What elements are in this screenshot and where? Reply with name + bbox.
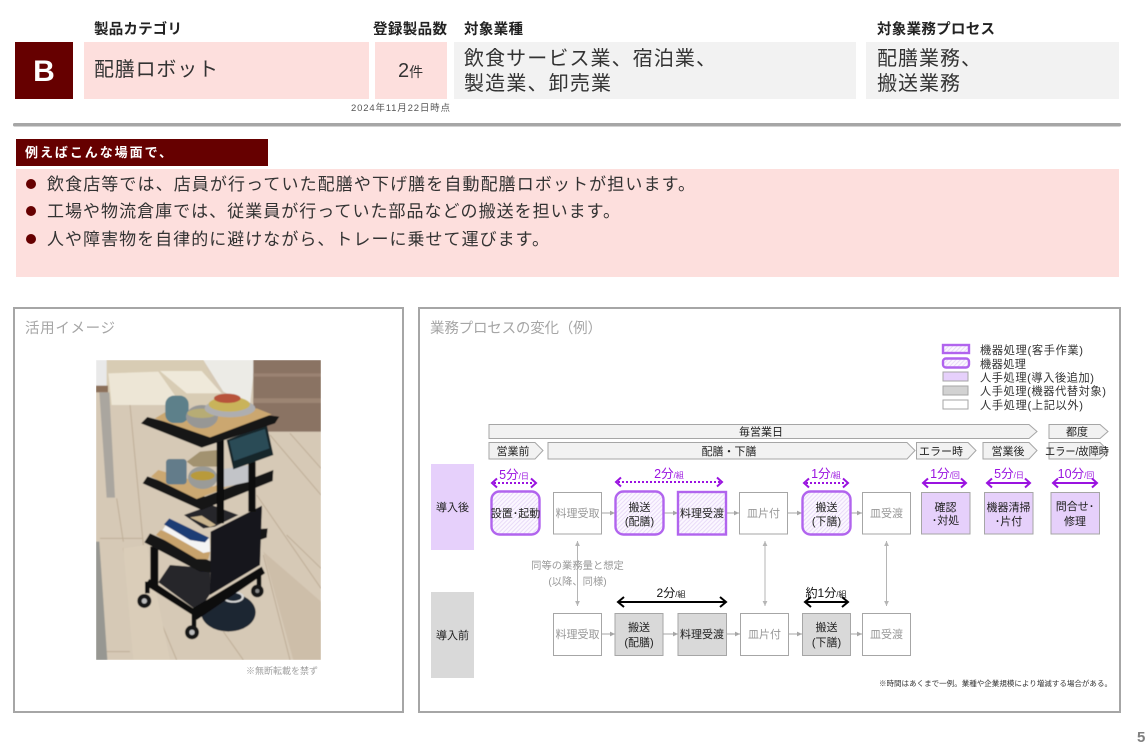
box: transport serving — [615, 614, 663, 656]
box: inquiry and repair: 修理 — [1064, 514, 1086, 528]
timeline banners: 都度 — [1066, 426, 1088, 438]
dotted arrow: setup — [492, 478, 536, 488]
box: clear dishes — [740, 492, 788, 534]
casters — [137, 594, 151, 608]
heading: registered products: 登録製品数 — [373, 20, 448, 38]
field: target business process — [866, 42, 1119, 99]
scene banner: 例えばこんな場面で、 — [25, 145, 172, 160]
usage image heading: 活用イメージ — [25, 320, 115, 337]
box: cleaning: 機器清掃 — [986, 500, 1030, 514]
box: receive food: 料理受取 — [556, 627, 600, 641]
box: cleaning: ･片付 — [995, 515, 1022, 528]
field: target business process: 搬送業務 — [877, 72, 960, 95]
box: setup and start: 設置･起動 — [491, 506, 540, 520]
time labels after — [499, 467, 1094, 482]
bullet 2: 工場や物流倉庫では、従業員が行っていた部品などの搬送を担います。 — [47, 202, 620, 221]
timeline banners: エラー/故障時 — [1045, 444, 1109, 458]
solid arrow: inquiry — [1053, 478, 1097, 488]
box: clear dishes: 皿片付 — [747, 507, 780, 520]
bottom plate — [158, 565, 211, 612]
box: clear dishes — [740, 614, 788, 656]
panel: scene description — [16, 169, 1119, 277]
field: target industries: 製造業、卸売業 — [464, 72, 611, 95]
floor planks — [98, 405, 321, 660]
timeline banners: エラー時 — [919, 445, 963, 458]
note: same workload assumed: 同等の業務量と想定 — [531, 559, 624, 572]
timeline banners — [489, 424, 1109, 459]
field: target industries: 飲食サービス業、宿泊業、 — [464, 47, 716, 70]
box: transport clearing: 搬送 — [816, 500, 838, 514]
copyright note: ※無断転載を禁ず — [246, 665, 318, 676]
time labels before: 約1分/組 — [806, 585, 846, 600]
box: receive food — [554, 614, 602, 656]
frame rails — [147, 578, 194, 615]
box: transport serving: 搬送 — [628, 500, 650, 514]
box: setup and start — [491, 492, 540, 534]
time labels after: 1分/回 — [930, 467, 960, 481]
box: transport clearing — [802, 614, 850, 656]
panel: business process change — [419, 308, 1120, 712]
solid arrow: check — [923, 478, 966, 488]
timeline banners: 営業前 — [496, 444, 530, 458]
box: receive food — [554, 492, 602, 534]
timeline banners: 毎営業日 — [739, 424, 783, 438]
legend — [943, 343, 1106, 412]
robot base — [201, 593, 256, 632]
box: hand over dishes — [862, 614, 910, 656]
vertical comparison arrows — [578, 541, 886, 606]
legend: 人手処理(機器代替対象) — [980, 384, 1106, 398]
solid arrow: cleaning — [987, 478, 1030, 488]
row label: after introduction — [431, 464, 474, 550]
middle shelf — [143, 470, 273, 510]
field: target business process: 配膳業務、 — [877, 47, 981, 70]
footnote: ※時間はあくまで一例。業種や企業規模により増減する場合がある。 — [879, 678, 1112, 688]
date note: 2024年11月22日時点 — [351, 102, 450, 114]
horizontal flow arrows — [602, 513, 862, 634]
photo: serving robot — [96, 360, 321, 660]
box: check and respond: 確認 — [934, 501, 956, 514]
field: product count — [375, 42, 447, 99]
box: hand over dishes: 皿受渡 — [870, 628, 903, 641]
box: transport serving — [616, 492, 664, 534]
box: check and respond — [922, 492, 970, 534]
time arrows before — [618, 597, 848, 607]
category badge B — [15, 42, 73, 99]
box: cleaning — [984, 492, 1033, 534]
poles — [217, 438, 224, 523]
scene banner — [16, 139, 268, 166]
box: hand over food — [678, 492, 726, 534]
legend: 人手処理(上記以外) — [980, 398, 1083, 412]
time arrows after — [492, 478, 1097, 488]
panel: usage image — [14, 308, 403, 712]
box: transport clearing — [802, 492, 850, 534]
field: product count: 2件 — [398, 60, 423, 82]
note: same workload assumed: (以降、同様) — [548, 575, 607, 588]
heading: product category: 製品カテゴリ — [94, 20, 182, 38]
legend: 機器処理 — [980, 358, 1026, 371]
before-row process boxes — [554, 614, 910, 656]
time labels after: 5分/日 — [994, 467, 1024, 481]
row label: before introduction — [431, 592, 474, 678]
box: hand over dishes — [862, 492, 910, 534]
time labels after: 5分/日 — [499, 468, 529, 482]
time labels before: 2分/組 — [657, 586, 685, 600]
row label: after introduction: 導入後 — [436, 500, 469, 514]
note: same workload assumed — [531, 559, 624, 588]
box: hand over food — [678, 614, 726, 656]
lower shelf — [144, 533, 212, 572]
bullet 1: 飲食店等では、店員が行っていた配膳や下げ膳を自動配膳ロボットが担います。 — [47, 175, 695, 194]
box: transport clearing: 搬送 — [816, 620, 838, 634]
field: product category: 配膳ロボット — [94, 58, 218, 81]
dotted arrow: serving — [616, 478, 722, 486]
box: transport clearing: (下膳) — [812, 635, 841, 649]
time labels after: 10分/回 — [1058, 467, 1094, 481]
category badge B: B — [33, 55, 55, 88]
box: hand over food: 料理受渡 — [680, 627, 724, 641]
box: transport serving: (配膳) — [625, 514, 654, 528]
bullet 3: 人や障害物を自律的に避けながら、トレーに乗せて運びます。 — [47, 230, 549, 249]
heading: target business process: 対象業務プロセス — [877, 20, 995, 38]
box: clear dishes: 皿片付 — [748, 628, 781, 641]
process heading: 業務プロセスの変化（例） — [430, 320, 602, 337]
time labels after: 1分/組 — [811, 467, 841, 481]
page number: 5 — [1137, 729, 1145, 746]
row label: before introduction: 導入前 — [436, 628, 469, 642]
box: transport clearing: (下膳) — [812, 514, 841, 528]
box: transport serving: 搬送 — [628, 620, 650, 634]
box: receive food: 料理受取 — [556, 506, 600, 520]
tablet — [227, 424, 273, 469]
box: hand over food: 料理受渡 — [680, 506, 724, 520]
after-row process boxes — [491, 492, 1100, 534]
heading: target industries: 対象業種 — [464, 20, 524, 38]
box: check and respond: ･対処 — [932, 514, 959, 527]
box: inquiry and repair — [1051, 492, 1100, 534]
box: transport serving: (配膳) — [624, 635, 654, 649]
time labels after: 2分/組 — [654, 467, 684, 481]
field: product category — [84, 42, 369, 99]
dotted arrow: clearing — [804, 478, 848, 488]
legend: 機器処理(客手作業) — [980, 343, 1083, 357]
field: target industries — [454, 42, 856, 99]
timeline banners: 配膳・下膳 — [702, 444, 756, 458]
box: hand over dishes: 皿受渡 — [870, 507, 903, 520]
top shelf — [141, 415, 279, 448]
box: inquiry and repair: 問合せ･ — [1056, 500, 1094, 513]
timeline banners: 営業後 — [992, 444, 1024, 458]
legend: 人手処理(導入後追加) — [980, 370, 1094, 384]
time labels before — [657, 585, 846, 600]
